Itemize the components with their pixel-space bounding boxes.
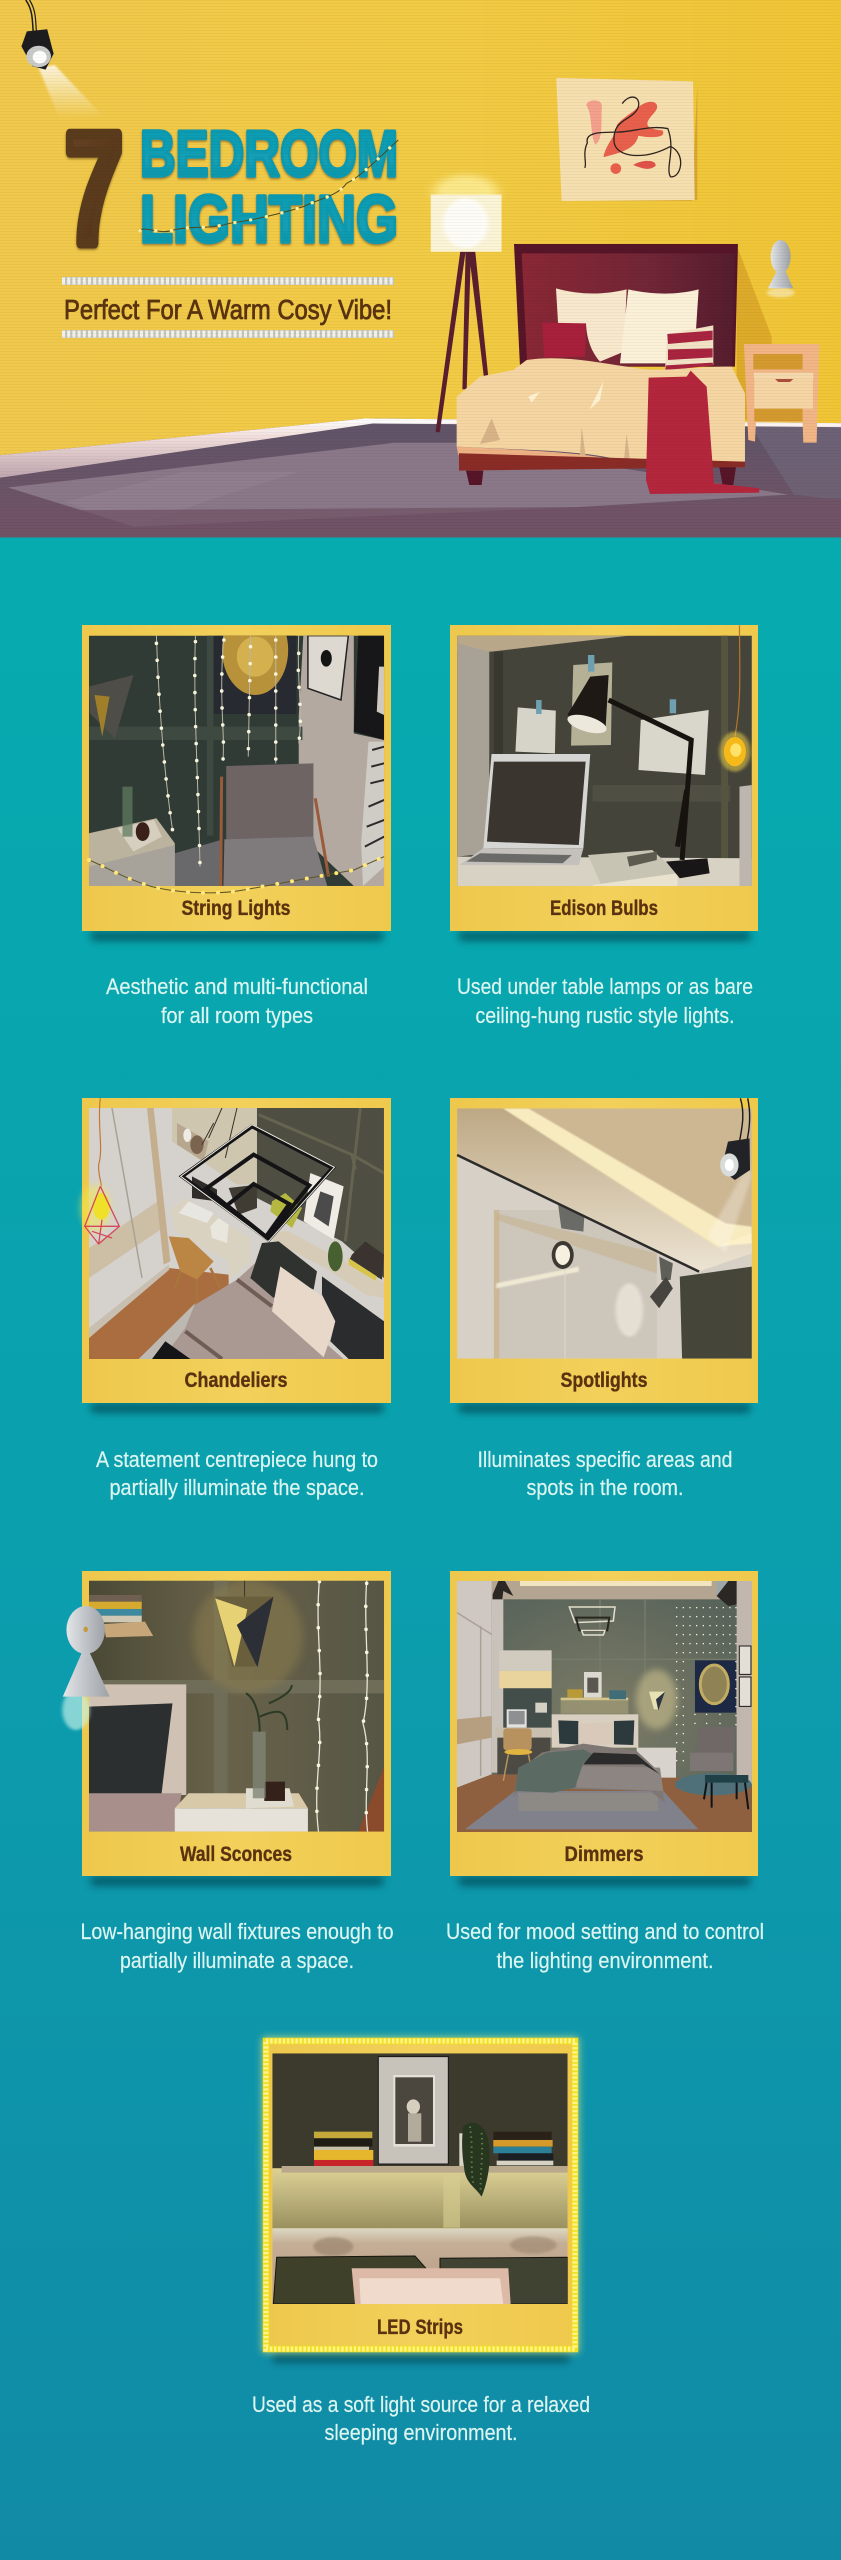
wall painting bbox=[556, 78, 697, 201]
description: Chandeliers: partially illuminate the space. bbox=[110, 1475, 364, 1500]
photo: full bedroom bbox=[457, 1581, 752, 1832]
description: Spotlights bbox=[478, 1447, 732, 1500]
card frame bbox=[266, 2041, 575, 2349]
card shadow bbox=[90, 1876, 384, 1886]
description: LED Strips bbox=[252, 2392, 590, 2445]
card frame bbox=[82, 1098, 391, 1403]
description: Dimmers: the lighting environment. bbox=[496, 1948, 714, 1973]
bed bbox=[457, 244, 773, 494]
card: Edison Bulbs bbox=[450, 625, 758, 941]
page background: teal bbox=[0, 537, 841, 2560]
dotted strip below tagline bbox=[62, 330, 394, 338]
title number 7: 7 bbox=[65, 101, 123, 277]
card shadow bbox=[90, 1403, 384, 1413]
string of lights across title bbox=[138, 140, 398, 232]
photo: chair with string lights bbox=[89, 605, 384, 893]
description: Wall Sconces: partially illuminate a space. bbox=[120, 1948, 354, 1973]
description: Chandeliers bbox=[96, 1447, 378, 1500]
card: Dimmers bbox=[450, 1571, 758, 1886]
description: Wall Sconces bbox=[80, 1919, 394, 1973]
description: String Lights bbox=[106, 974, 368, 1028]
photo: desk with lamp bbox=[457, 625, 752, 886]
card frame bbox=[82, 1571, 391, 1876]
title line: LIGHTING: LIGHTING bbox=[140, 182, 398, 257]
card title: Dimmers bbox=[564, 1843, 644, 1866]
card title: String Lights bbox=[182, 897, 290, 920]
card frame bbox=[450, 1571, 758, 1876]
card: LED Strips bbox=[266, 2041, 575, 2363]
card: Wall Sconces bbox=[62, 1571, 391, 1886]
description: Dimmers: Used for mood setting and to control bbox=[446, 1919, 764, 1944]
wall sconce bbox=[767, 240, 795, 297]
card title: LED Strips bbox=[377, 2316, 463, 2339]
LED strip border bbox=[266, 2041, 575, 2349]
description: Edison Bulbs bbox=[457, 974, 753, 1028]
tagline: Perfect For A Warm Cosy Vibe! bbox=[64, 294, 392, 325]
floor and baseboard bbox=[0, 419, 841, 537]
description: LED Strips: sleeping environment. bbox=[324, 2420, 518, 2445]
LED glow bbox=[266, 2041, 575, 2349]
dotted strip above tagline bbox=[62, 277, 394, 285]
description: LED Strips: Used as a soft light source for a relaxed bbox=[252, 2392, 590, 2417]
photo: wall sconce and bedside bbox=[62, 1580, 384, 1832]
photo: chandelier over bedroom bbox=[80, 1098, 384, 1359]
card shadow bbox=[458, 1403, 751, 1413]
description: String Lights: Aesthetic and multi-functional bbox=[106, 974, 368, 999]
floor lamp bbox=[431, 175, 502, 432]
card title: Wall Sconces bbox=[180, 1843, 292, 1866]
card: Chandeliers bbox=[80, 1098, 391, 1413]
card title: Spotlights bbox=[560, 1369, 648, 1392]
description: Edison Bulbs: ceiling-hung rustic style lights. bbox=[476, 1003, 734, 1028]
card shadow bbox=[90, 931, 384, 941]
description: Chandeliers: A statement centrepiece hung to bbox=[96, 1447, 378, 1472]
card shadow bbox=[272, 2352, 570, 2363]
card frame bbox=[450, 1098, 758, 1403]
title line: BEDROOM: BEDROOM bbox=[140, 117, 398, 190]
description: Dimmers bbox=[446, 1919, 764, 1973]
description: Spotlights: Illuminates specific areas and bbox=[478, 1447, 732, 1472]
card frame bbox=[450, 625, 758, 931]
description: Wall Sconces: Low-hanging wall fixtures enough to bbox=[80, 1919, 394, 1944]
card: String Lights bbox=[82, 605, 391, 941]
card title: Chandeliers bbox=[184, 1369, 288, 1392]
photo: shelf with LED strip bbox=[272, 2053, 568, 2304]
wall texture overlay bbox=[0, 0, 841, 537]
photo: ceiling spotlights bbox=[457, 1098, 752, 1359]
description: Spotlights: spots in the room. bbox=[526, 1475, 684, 1500]
hero: bedroom illustration bbox=[0, 0, 841, 537]
card shadow bbox=[458, 931, 751, 941]
spotlight lamp bbox=[21, 0, 105, 118]
card: Spotlights bbox=[450, 1098, 758, 1413]
wall bbox=[0, 0, 841, 480]
card title: Edison Bulbs bbox=[550, 897, 658, 920]
description: Edison Bulbs: Used under table lamps or as bare bbox=[457, 974, 753, 999]
description: String Lights: for all room types bbox=[161, 1003, 313, 1028]
card frame bbox=[82, 625, 391, 931]
nightstand bbox=[744, 344, 819, 443]
card shadow bbox=[458, 1876, 751, 1886]
